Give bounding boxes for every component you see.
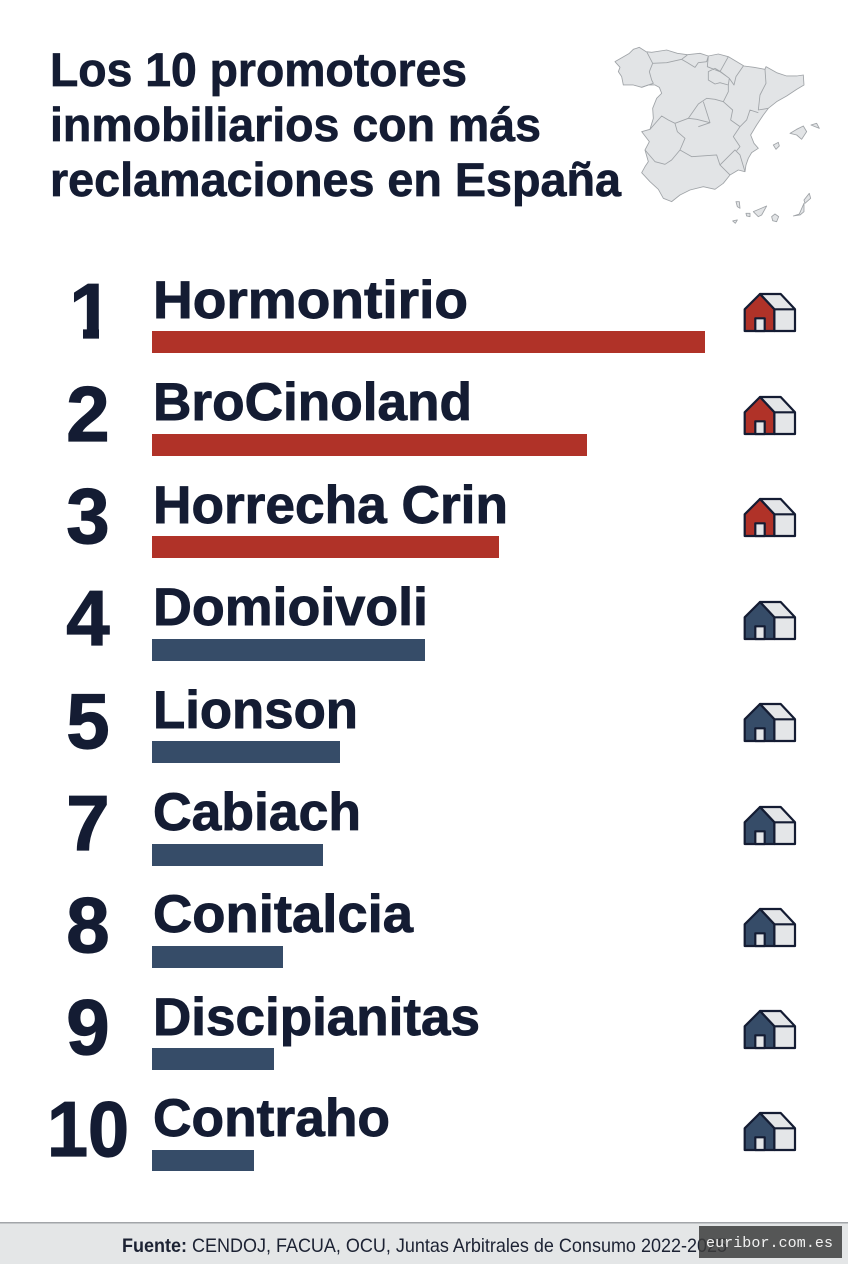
row 9: Discipianitas: Discipianitas bbox=[153, 988, 480, 1047]
row 10: Contraho: Contraho bbox=[153, 1089, 390, 1148]
icon: house bbox=[745, 294, 795, 331]
row 10: Contraho: 10 bbox=[47, 1085, 129, 1173]
footer bbox=[0, 1222, 848, 1264]
row 1: Hormontirio: 1 bbox=[69, 267, 113, 355]
watermark: euribor.com.es bbox=[706, 1235, 833, 1252]
row 4: Domioivoli bbox=[66, 574, 795, 662]
icon: house bbox=[745, 807, 795, 844]
row 5: Lionson bbox=[66, 677, 795, 765]
row 5: Lionson: 5 bbox=[66, 677, 110, 765]
title bbox=[50, 43, 622, 206]
icon: house bbox=[745, 704, 795, 741]
row 3: Horrecha Crin bbox=[66, 472, 795, 560]
row 9: Discipianitas bbox=[66, 983, 795, 1071]
footer: Fuente: CENDOJ, FACUA, OCU, Juntas Arbitrales de Consumo 2022-2025 bbox=[122, 1235, 727, 1257]
icon: house bbox=[745, 397, 795, 434]
icon: house bbox=[745, 499, 795, 536]
row 8: Conitalcia: Conitalcia bbox=[153, 885, 414, 944]
icon: house bbox=[745, 1113, 795, 1150]
row 4: Domioivoli: 4 bbox=[66, 574, 110, 662]
row 2: BroCinoland: 2 bbox=[66, 370, 110, 458]
map of Spain bbox=[615, 47, 819, 223]
title: inmobiliarios con más bbox=[50, 98, 541, 151]
icon: house bbox=[745, 909, 795, 946]
row 9: Discipianitas: 9 bbox=[66, 983, 110, 1071]
row 2: BroCinoland: BroCinoland bbox=[153, 373, 472, 432]
title: reclamaciones en España bbox=[50, 153, 622, 206]
row 8: Conitalcia: 8 bbox=[66, 881, 110, 969]
row 3: Horrecha Crin: Horrecha Crin bbox=[153, 476, 508, 535]
icon: house bbox=[745, 602, 795, 639]
row 5: Lionson: Lionson bbox=[153, 681, 358, 740]
row 7: Cabiach: Cabiach bbox=[153, 783, 361, 842]
title: Los 10 promotores bbox=[50, 43, 467, 96]
row 10: Contraho bbox=[47, 1085, 795, 1173]
row 7: Cabiach: 7 bbox=[66, 779, 110, 867]
row 1: Hormontirio bbox=[60, 267, 795, 355]
row 1: Hormontirio: Hormontirio bbox=[153, 271, 468, 330]
watermark bbox=[699, 1226, 842, 1258]
row 2: BroCinoland bbox=[66, 370, 795, 458]
icon: house bbox=[745, 1011, 795, 1048]
row 8: Conitalcia bbox=[66, 881, 795, 969]
row 4: Domioivoli: Domioivoli bbox=[153, 578, 428, 637]
row 7: Cabiach bbox=[66, 779, 795, 867]
row 3: Horrecha Crin: 3 bbox=[66, 472, 110, 560]
